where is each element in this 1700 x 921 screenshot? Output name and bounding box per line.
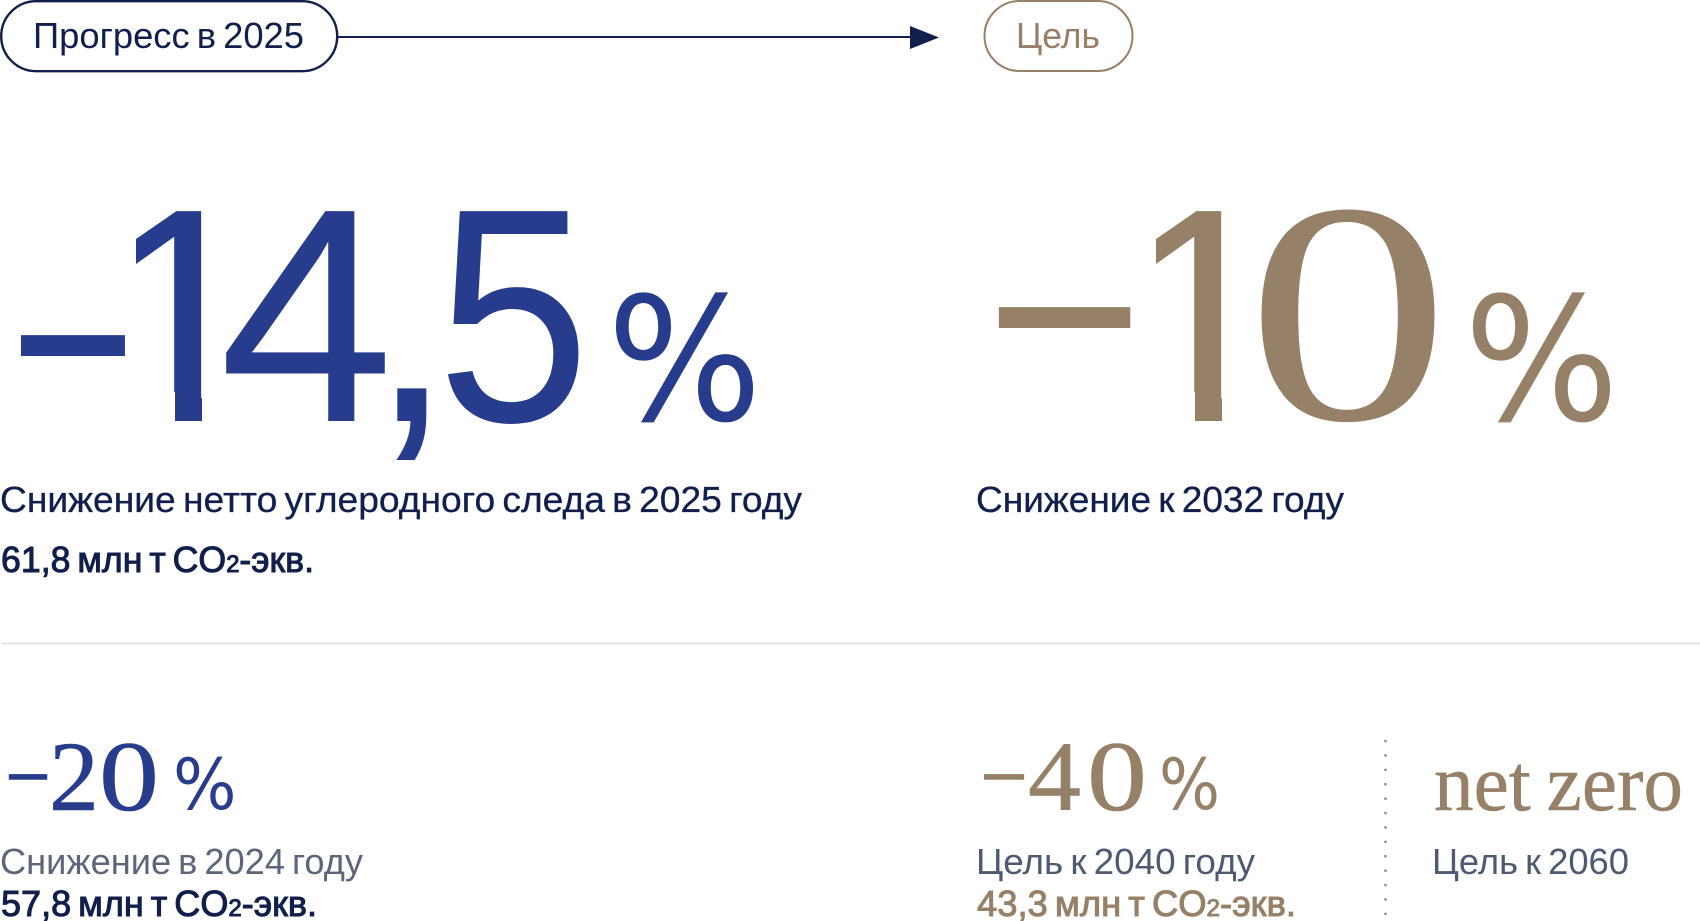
figure: minus 40 percent: 0 xyxy=(1087,721,1147,832)
big figure: minus 14,5 percent: 4 xyxy=(219,145,394,486)
figure: minus 40 percent: % xyxy=(1159,744,1220,826)
caption 2040: Цель к 2040 году xyxy=(976,841,1255,882)
header: progress pill xyxy=(1,1,337,71)
big figure amount: 61,8 млн т CO2-экв. xyxy=(1,539,314,580)
big figure: minus 10 percent: 0 xyxy=(1246,139,1450,488)
figure: minus 20 percent: 0 xyxy=(99,721,159,832)
figure: minus 40 percent: − xyxy=(980,721,1028,832)
dotted separator xyxy=(1384,741,1387,915)
header: progress pill: Прогресс в 2025 xyxy=(33,15,304,56)
figure: minus 20 percent: % xyxy=(173,744,236,826)
arrow: progress to goal xyxy=(337,26,939,49)
big figure: minus 14,5 percent: 1 xyxy=(98,145,267,486)
goal caption 2032: Снижение к 2032 году xyxy=(976,479,1344,520)
figure: minus 20 percent xyxy=(5,721,236,832)
big figure: minus 10 percent: % xyxy=(1464,260,1619,461)
big figure: minus 14,5 percent: % xyxy=(607,260,762,461)
figure: minus 40 percent: 4 xyxy=(1028,721,1081,832)
big figure: minus 10 percent: 1 xyxy=(1118,145,1287,486)
caption 2060: Цель к 2060 xyxy=(1432,841,1629,882)
big figure caption: Снижение нетто углеродного следа в 2025 году xyxy=(0,479,802,520)
figure: minus 20 percent: − xyxy=(5,721,51,832)
big figure: minus 10 percent xyxy=(998,210,1610,422)
big figure: minus 14,5 percent: , xyxy=(369,145,454,486)
figure: minus 20 percent: 2 xyxy=(49,721,99,832)
caption 2024: Снижение в 2024 году xyxy=(0,841,363,882)
header: goal pill: Цель xyxy=(1016,15,1100,56)
figure: minus 40 percent xyxy=(980,721,1220,832)
big figure: minus 14,5 percent: 5 xyxy=(437,145,590,486)
divider xyxy=(2,642,1700,644)
big figure: minus 10 percent: − xyxy=(986,151,1144,478)
big figure: minus 14,5 percent: − xyxy=(10,179,135,506)
header: goal pill xyxy=(984,1,1132,71)
net zero: net zero xyxy=(1434,738,1683,828)
big figure: minus 14,5 percent xyxy=(20,211,753,460)
